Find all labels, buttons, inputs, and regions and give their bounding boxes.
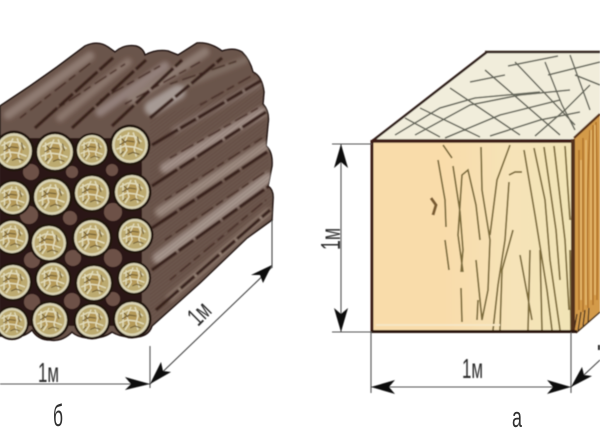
illustration а: solid wood cube xyxy=(371,52,600,333)
dimension: stack width 1м xyxy=(0,346,150,390)
dimension: stack depth 1м: 1м xyxy=(181,295,217,331)
illustration б: stack of round logs xyxy=(0,43,273,340)
side hatching xyxy=(149,142,152,324)
cube top face xyxy=(371,52,600,142)
dimension: cube width 1м xyxy=(371,332,571,394)
log ends xyxy=(0,125,154,340)
label а: а xyxy=(512,402,523,434)
dimension: stack depth 1м xyxy=(150,220,272,384)
bark dark grooves xyxy=(20,56,272,322)
bark highlights xyxy=(8,52,268,298)
dimension: cube height 1м xyxy=(315,144,372,332)
dimension: cube height 1м: 1м xyxy=(315,228,346,250)
cube front face xyxy=(371,139,577,332)
stack silhouette xyxy=(0,43,273,340)
dimension: cube depth 1м xyxy=(571,345,600,387)
dimension: cube width 1м: 1м xyxy=(462,353,483,384)
dimension: stack width 1м: 1м xyxy=(38,357,59,388)
gaps between log ends xyxy=(0,138,142,326)
label б: б xyxy=(53,398,63,433)
bark shading xyxy=(8,52,273,328)
cube side face xyxy=(573,114,600,333)
